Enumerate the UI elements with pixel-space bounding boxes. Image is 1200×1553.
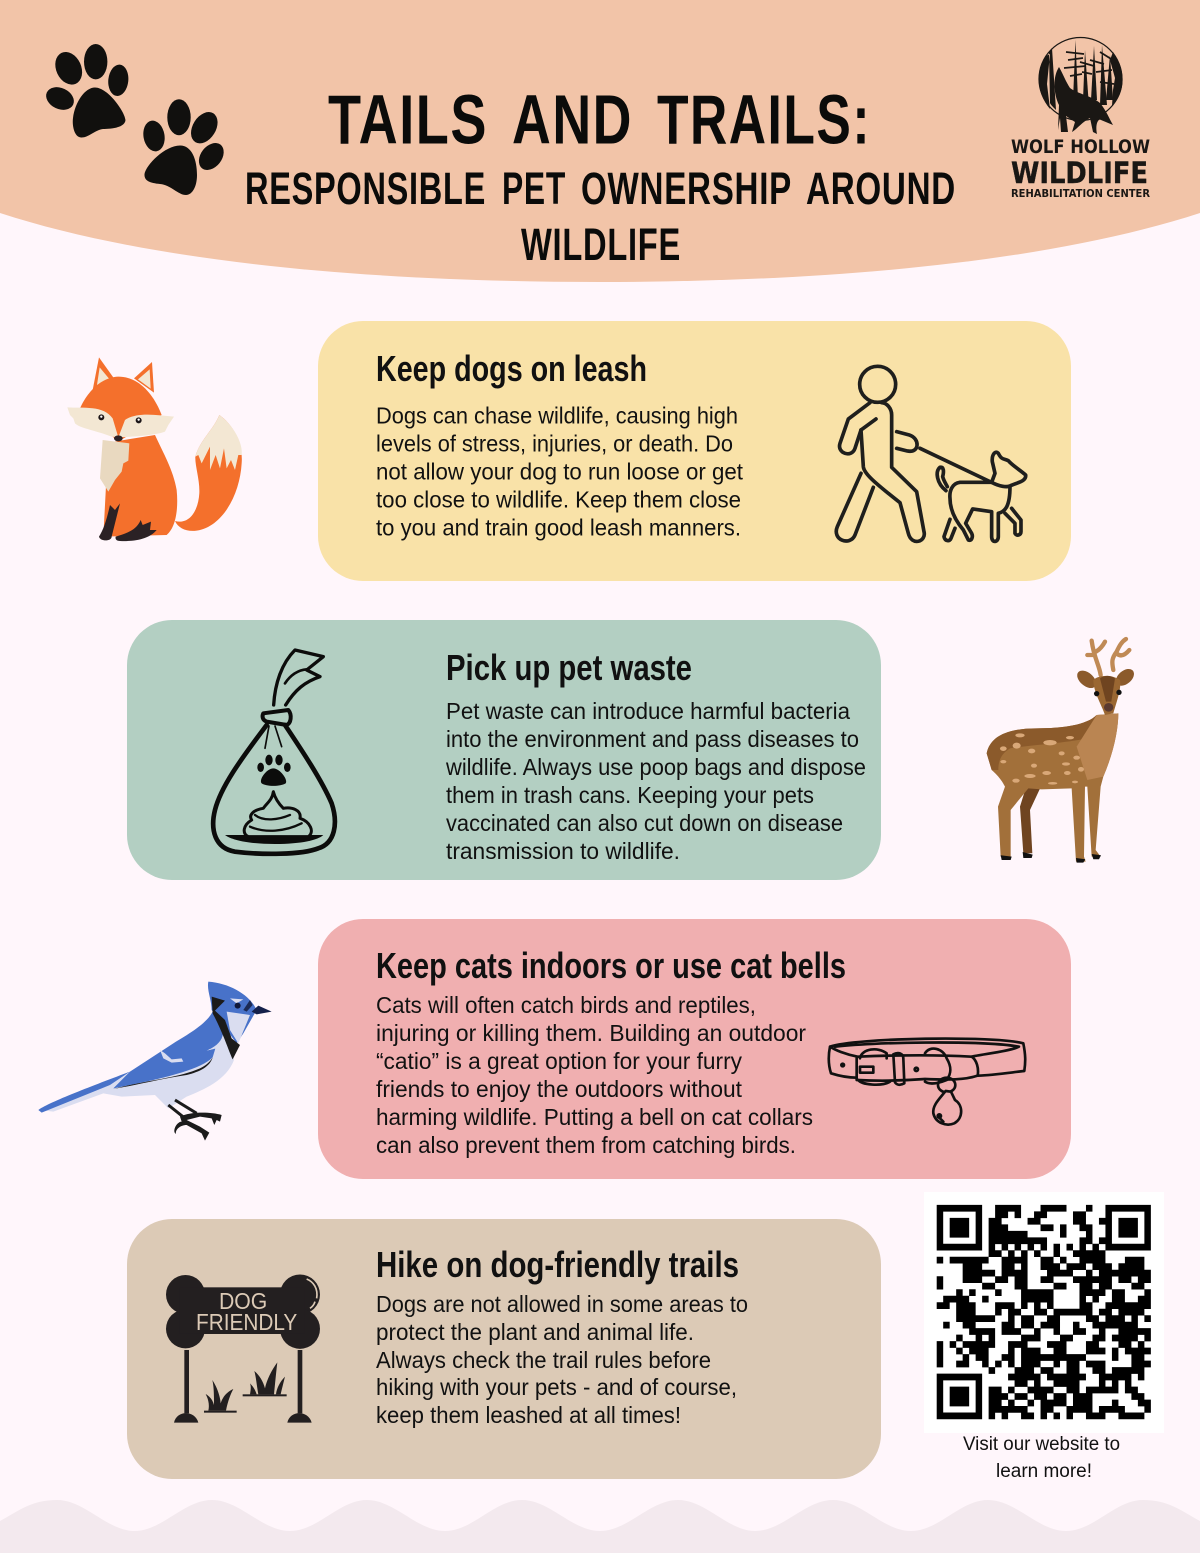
text block: leash advice [376, 402, 744, 540]
text block: leash advice: levels of stress, injuries, or death. Do [376, 430, 733, 456]
heading: pick up pet waste: Pick up pet waste [446, 647, 692, 688]
illustration: fox [67, 357, 242, 541]
title: AROUND [806, 163, 956, 214]
icon: cat collar with bell [829, 1039, 1025, 1125]
title: WILDLIFE [521, 219, 681, 270]
text block: waste advice: transmission to wildlife. [446, 838, 680, 864]
text block: leash advice: Dogs can chase wildlife, causing high [376, 402, 738, 428]
text block: cat advice [376, 992, 813, 1158]
text block: cat advice: “catio” is a great option for your furry [376, 1048, 742, 1074]
caption: visit website [963, 1434, 1120, 1482]
title: TRAILS: [657, 80, 871, 158]
text block: cat advice: harming wildlife. Putting a bell on cat collars [376, 1104, 813, 1130]
panel: keep dogs on leash [318, 321, 1071, 581]
text block: trail advice: hiking with your pets - and of course, [376, 1374, 737, 1400]
title: RESPONSIBLE [245, 163, 486, 214]
title: PET [502, 163, 566, 214]
text block: leash advice: too close to wildlife. Keep them close [376, 486, 741, 512]
icon: dog friendly sign: DOG [219, 1288, 267, 1314]
panel: hike on dog-friendly trails [127, 1219, 881, 1479]
text block: cat advice: Cats will often catch birds and reptiles, [376, 992, 756, 1018]
title: AND [512, 80, 633, 158]
text block: waste advice: them in trash cans. Keeping your pets [446, 782, 814, 808]
text block: leash advice: not allow your dog to run loose or get [376, 458, 744, 484]
heading: keep dogs on leash: Keep dogs on leash [376, 348, 647, 389]
logo: Wolf Hollow Wildlife: WILDLIFE [1011, 156, 1148, 190]
title: TAILS [328, 80, 488, 158]
title: OWNERSHIP [581, 163, 792, 214]
caption: visit website: learn more! [996, 1461, 1092, 1482]
caption: visit website: Visit our website to [963, 1434, 1120, 1455]
text block: cat advice: friends to enjoy the outdoors without [376, 1076, 743, 1102]
logo: Wolf Hollow Wildlife [1011, 38, 1150, 200]
text block: cat advice: can also prevent them from catching birds. [376, 1132, 796, 1158]
icon: dog friendly sign [166, 1274, 320, 1423]
illustration: blue jay [38, 982, 272, 1141]
icon: poop bag [213, 650, 335, 854]
icon: paw prints [42, 44, 229, 195]
text block: trail advice: Always check the trail rules before [376, 1347, 711, 1373]
text block: waste advice: wildlife. Always use poop bags and dispose [445, 754, 866, 780]
bottom wave decoration [0, 1500, 1200, 1553]
icon: dog friendly sign: FRIENDLY [196, 1309, 297, 1335]
text block: trail advice: keep them leashed at all times! [376, 1402, 681, 1428]
panel: pick up pet waste [127, 620, 881, 880]
icon: person walking dog [836, 366, 1026, 541]
text block: waste advice: Pet waste can introduce harmful bacteria [446, 698, 850, 724]
QR code [924, 1192, 1164, 1433]
heading: keep cats indoors: Keep cats indoors or use cat bells [376, 945, 846, 986]
text block: trail advice: protect the plant and animal life. [376, 1319, 694, 1345]
text block: trail advice: Dogs are not allowed in some areas to [376, 1291, 748, 1317]
logo: Wolf Hollow Wildlife: REHABILITATION CENTER [1011, 188, 1150, 200]
title [245, 80, 956, 270]
text block: trail advice [376, 1291, 748, 1428]
text block: waste advice: into the environment and pass diseases to [446, 726, 859, 752]
header banner [0, 0, 1200, 282]
text block: waste advice [445, 698, 866, 864]
logo: Wolf Hollow Wildlife: WOLF HOLLOW [1011, 136, 1150, 158]
text block: waste advice: vaccinated can also cut down on disease [446, 810, 843, 836]
panel: keep cats indoors [318, 919, 1071, 1179]
text block: cat advice: injuring or killing them. Building an outdoor [376, 1020, 806, 1046]
illustration: deer [987, 639, 1137, 863]
heading: hike on dog-friendly trails: Hike on dog-friendly trails [376, 1244, 739, 1285]
text block: leash advice: to you and train good leash manners. [376, 514, 741, 540]
